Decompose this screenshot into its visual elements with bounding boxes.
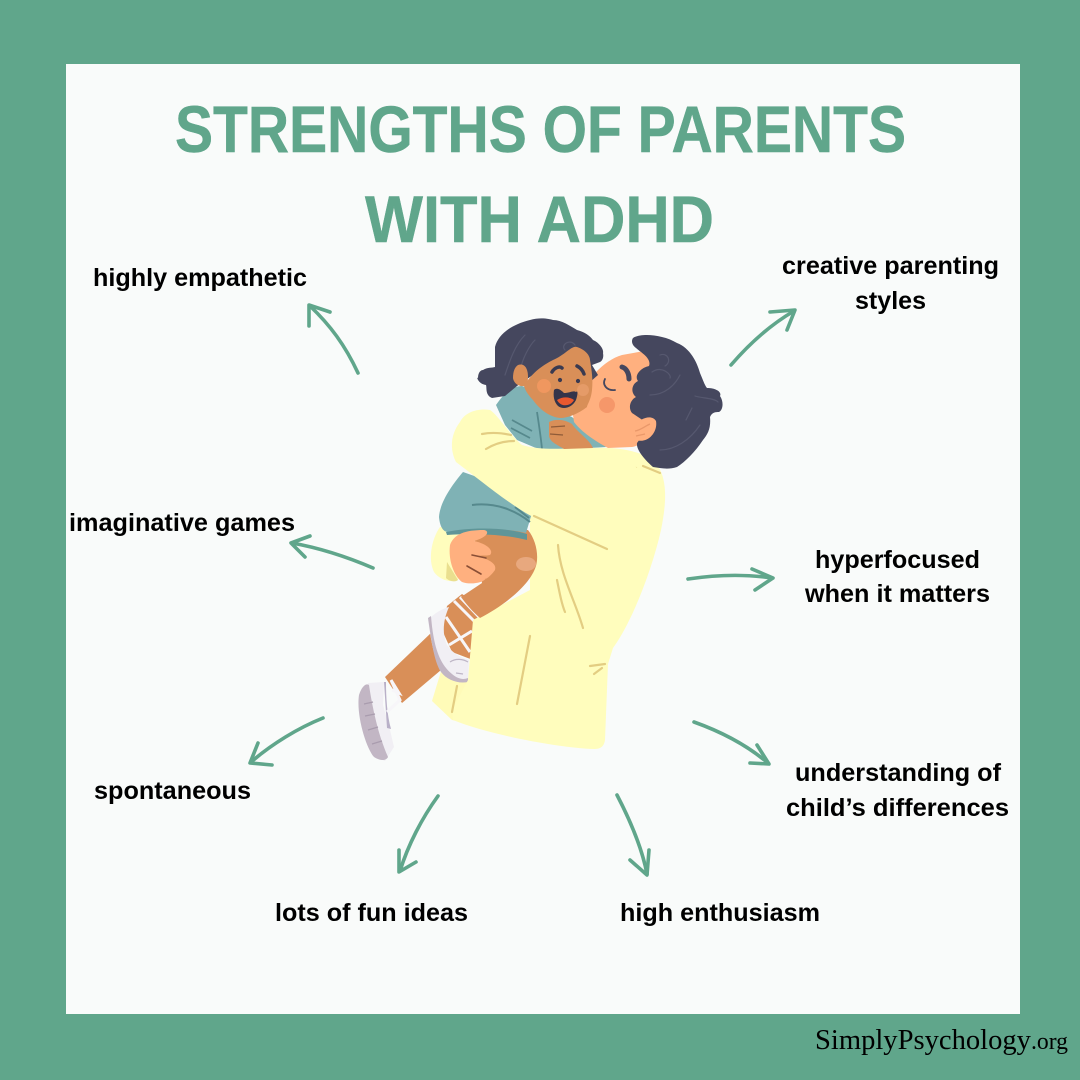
child's hair	[477, 318, 603, 398]
title	[175, 92, 906, 256]
label: hyperfocused when it matters: hyperfocused	[815, 546, 980, 574]
shirt fold lines	[511, 412, 542, 449]
child's cheeks	[537, 379, 551, 393]
illustration: parent hugging child	[358, 318, 723, 761]
child's face	[524, 347, 592, 418]
child's head	[477, 318, 603, 418]
lace straps on shin	[387, 680, 400, 712]
label: lots of fun ideas: lots of fun ideas	[275, 899, 468, 927]
arrow: to lots of fun ideas	[399, 796, 438, 872]
thigh	[461, 526, 537, 618]
upper shoe	[428, 607, 469, 683]
parent's cheek	[599, 397, 615, 413]
child's shirt	[496, 386, 606, 451]
parent's hand on leg	[450, 530, 495, 583]
label: creative parenting styles: styles	[855, 287, 926, 315]
title: WITH ADHD	[365, 182, 714, 256]
arrow: to imaginative games	[291, 536, 373, 568]
child's eyes and brows	[552, 366, 584, 382]
child's shorts	[439, 472, 532, 533]
coat back panel	[432, 668, 470, 722]
arrow: to highly empathetic	[309, 305, 358, 373]
child's finger lines	[550, 426, 565, 435]
arrow: to creative parenting styles	[731, 310, 795, 365]
label: hyperfocused when it matters: when it matters	[804, 580, 990, 608]
label: hyperfocused when it matters	[804, 546, 990, 608]
label: understanding of child's differences: understanding of	[795, 759, 1002, 787]
far leg calf	[442, 594, 490, 660]
parent's arm wrapped around child	[452, 410, 644, 552]
arrow: to high enthusiasm	[617, 795, 649, 875]
panel: white content area	[66, 64, 1020, 1014]
knee highlight	[516, 557, 536, 571]
parent's head	[570, 350, 662, 448]
label: understanding of child's differences: child’s differences	[786, 794, 1009, 822]
left sleeve cuff	[431, 527, 470, 581]
parent's eye and eyebrow	[604, 367, 629, 390]
coat fold lines	[452, 466, 660, 712]
child's hand	[549, 420, 593, 449]
label: creative parenting styles	[782, 252, 999, 315]
lower leg and shin	[385, 632, 441, 703]
label: creative parenting styles: creative parenting	[782, 252, 999, 280]
main coat	[452, 448, 665, 749]
label: understanding of child's differences	[786, 759, 1009, 822]
title: STRENGTHS OF PARENTS	[175, 92, 906, 166]
arrow: to understanding of child's differences	[694, 722, 769, 764]
lower shoe	[358, 682, 394, 761]
parent's ear	[633, 417, 656, 441]
attribution: SimplyPsychology.org	[815, 1024, 1068, 1056]
arrow: to spontaneous	[250, 718, 323, 765]
arrow: to hyperfocused when it matters	[688, 569, 773, 590]
label: imaginative games: imaginative games	[69, 509, 295, 537]
parent's ear lines	[635, 424, 650, 436]
lace straps on calf	[446, 597, 479, 652]
label: spontaneous: spontaneous	[94, 777, 251, 805]
label: high enthusiasm: high enthusiasm	[620, 899, 820, 927]
parent's hair	[630, 335, 723, 469]
child's ear	[513, 364, 528, 386]
child's hair strands	[505, 335, 575, 375]
label: highly empathetic: highly empathetic	[93, 264, 307, 292]
child's mouth	[554, 389, 578, 408]
